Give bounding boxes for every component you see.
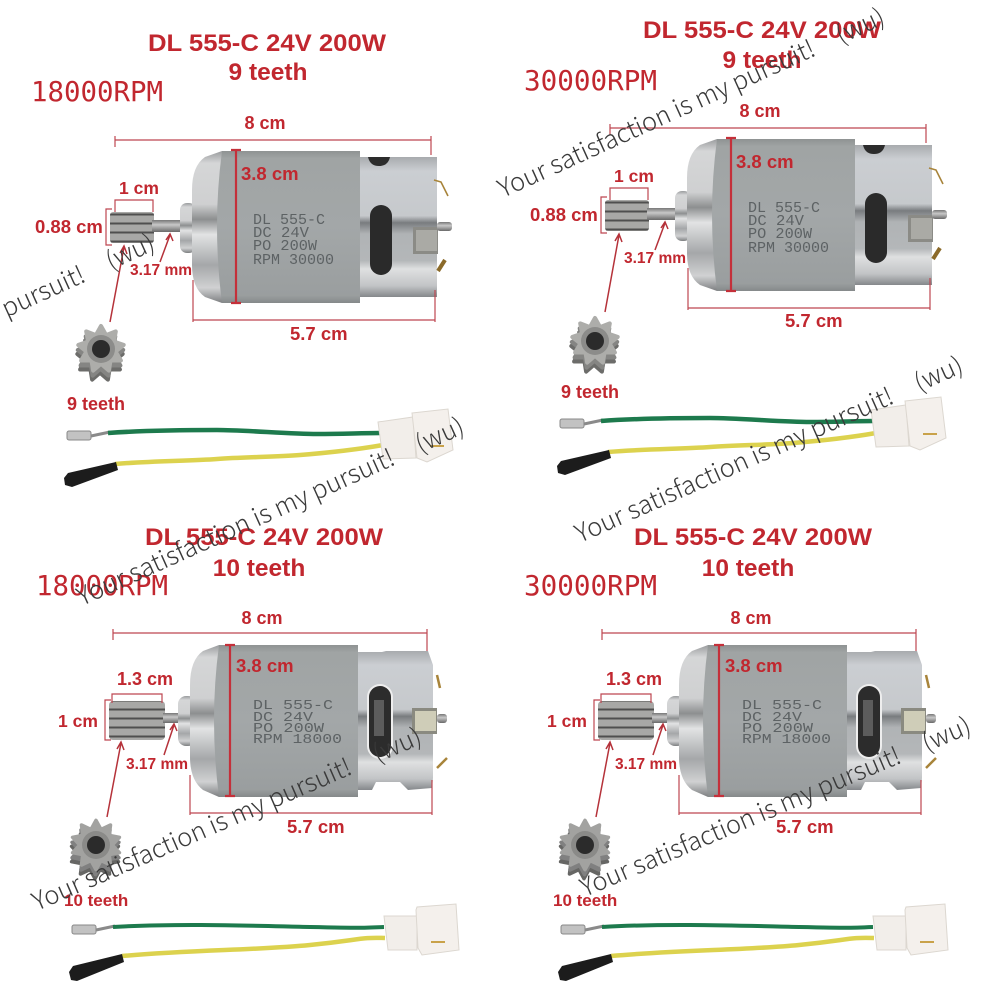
icon: gear 10 teeth: [72, 820, 119, 879]
title: [148, 30, 387, 86]
dimension: pinion width: 1 cm: [547, 711, 587, 731]
dimension: pinion length: 1 cm: [119, 178, 159, 198]
title: 9 teeth: [229, 59, 307, 86]
dimension: pinion length: [610, 166, 654, 200]
dimension: pinion length: 1.3 cm: [606, 669, 662, 689]
dimension: body length: [193, 280, 435, 344]
dimension: body length: 5.7 cm: [776, 816, 834, 837]
dimension: shaft: [615, 724, 677, 773]
dimension: diameter: 3.8 cm: [736, 151, 794, 172]
gear label: 10 teeth: [553, 891, 617, 910]
dimension: shaft: 3.17 mm: [615, 756, 677, 773]
motor markings: DC 24V: [253, 710, 314, 726]
dimension: overall length: 8 cm: [241, 608, 283, 628]
dimension: overall length: 8 cm: [244, 113, 286, 133]
motor: [605, 139, 947, 291]
motor markings: [253, 698, 342, 748]
dimension: body length: 5.7 cm: [785, 310, 843, 331]
panel: 18000RPM 10 teeth: [36, 524, 459, 981]
title: DL 555-C 24V 200W: [643, 17, 882, 44]
watermarks: Your satisfaction is my pursuit! (wu): [26, 717, 427, 918]
dimension: body length: [688, 268, 930, 331]
dimension: overall length: [610, 101, 926, 143]
rpm label: 30000RPM: [524, 65, 657, 97]
dimension: diameter: 3.8 cm: [725, 655, 783, 676]
dimension: pinion length: [115, 178, 159, 212]
panel: 30000RPM 10 teeth: [524, 524, 948, 981]
dimension: overall length: [602, 608, 916, 651]
dimension: overall length: [113, 608, 427, 651]
motor markings: DL 555-C: [742, 698, 822, 714]
arrow: gear to pinion: [596, 742, 613, 817]
motor markings: RPM 18000: [742, 732, 831, 748]
motor markings: DC 24V: [742, 710, 803, 726]
dimension: shaft: 3.17 mm: [126, 756, 188, 773]
title: DL 555-C 24V 200W: [634, 524, 873, 551]
motor: [110, 151, 452, 303]
motor markings: PO 200W: [748, 226, 812, 243]
dimension: diameter: 3.8 cm: [241, 163, 299, 184]
title: 10 teeth: [702, 555, 794, 582]
dimension: diameter: [726, 138, 794, 291]
motor markings: DL 555-C: [253, 212, 325, 229]
motor markings: PO 200W: [253, 238, 317, 255]
dimension: pinion width: [58, 700, 111, 740]
watermarks: Your satisfaction is my pursuit! (wu): [491, 0, 890, 205]
dimension: pinion width: 0.88 cm: [530, 204, 598, 225]
dimension: shaft: [126, 724, 188, 773]
dimension: overall length: [115, 113, 431, 155]
dimension: pinion length: [112, 669, 173, 703]
title: [145, 524, 384, 582]
motor markings: PO 200W: [742, 721, 814, 737]
dimension: body length: [190, 775, 432, 837]
dimension: diameter: [231, 150, 299, 303]
watermarks: Your satisfaction is my pursuit! (wu): [574, 707, 976, 904]
dimension: shaft: [624, 222, 686, 267]
dimension: body length: 5.7 cm: [287, 816, 345, 837]
motor markings: [748, 200, 829, 257]
dimension: diameter: [714, 645, 783, 796]
motor markings: RPM 30000: [748, 240, 829, 257]
motor markings: RPM 30000: [253, 252, 334, 269]
gear label: 9 teeth: [67, 394, 125, 414]
dimension: diameter: [225, 645, 294, 796]
dimension: overall length: 8 cm: [739, 101, 781, 121]
dimension: body length: 5.7 cm: [290, 323, 348, 344]
motor markings: [742, 698, 831, 748]
wires and connector: [558, 904, 948, 981]
arrow: gear to pinion: [605, 234, 622, 312]
dimension: pinion width: [35, 209, 112, 245]
motor markings: DC 24V: [253, 225, 309, 242]
arrow: gear to pinion: [110, 246, 127, 322]
title: DL 555-C 24V 200W: [145, 524, 384, 551]
dimension: pinion width: [547, 700, 600, 740]
rpm label: 30000RPM: [524, 570, 657, 602]
title: [643, 17, 882, 74]
watermarks: Your satisfaction is my pursuit! (wu): [569, 346, 968, 550]
motor markings: [253, 212, 334, 269]
dimension: body length: [679, 775, 921, 837]
wires and connector: [557, 397, 946, 475]
dimension: pinion length: [601, 669, 662, 703]
gear label: 9 teeth: [561, 382, 619, 402]
dimension: pinion length: 1.3 cm: [117, 669, 173, 689]
motor markings: DL 555-C: [748, 200, 820, 217]
title: DL 555-C 24V 200W: [148, 30, 387, 57]
panel: 30000RPM 9 teeth: [524, 17, 947, 475]
dimension: pinion width: 1 cm: [58, 711, 98, 731]
panel: 18000RPM 9 teeth: [31, 30, 453, 487]
motor: [598, 645, 936, 797]
title: 9 teeth: [723, 47, 801, 74]
watermarks: Your satisfaction is my pursuit! (wu): [70, 407, 469, 613]
icon: gear 9 teeth: [571, 318, 618, 372]
motor markings: DC 24V: [748, 213, 804, 230]
dimension: shaft: 3.17 mm: [624, 250, 686, 267]
title: 10 teeth: [213, 555, 305, 582]
icon: gear 9 teeth: [77, 326, 124, 380]
wires and connector: [69, 904, 459, 981]
dimension: diameter: 3.8 cm: [236, 655, 294, 676]
dimension: pinion width: 0.88 cm: [35, 216, 103, 237]
dimension: pinion length: 1 cm: [614, 166, 654, 186]
motor markings: DL 555-C: [253, 698, 333, 714]
title: [634, 524, 873, 582]
rpm label: 18000RPM: [36, 570, 168, 602]
gear label: 10 teeth: [64, 891, 128, 910]
dimension: pinion width: [530, 197, 607, 233]
wires and connector: [64, 409, 453, 487]
motor markings: PO 200W: [253, 721, 325, 737]
icon: gear 10 teeth: [561, 820, 608, 879]
motor markings: RPM 18000: [253, 732, 342, 748]
dimension: shaft: 3.17 mm: [130, 262, 192, 279]
arrow: gear to pinion: [107, 742, 124, 817]
motor: [109, 645, 447, 797]
dimension: overall length: 8 cm: [730, 608, 772, 628]
rpm label: 18000RPM: [31, 76, 163, 108]
dimension: shaft: [130, 234, 192, 279]
